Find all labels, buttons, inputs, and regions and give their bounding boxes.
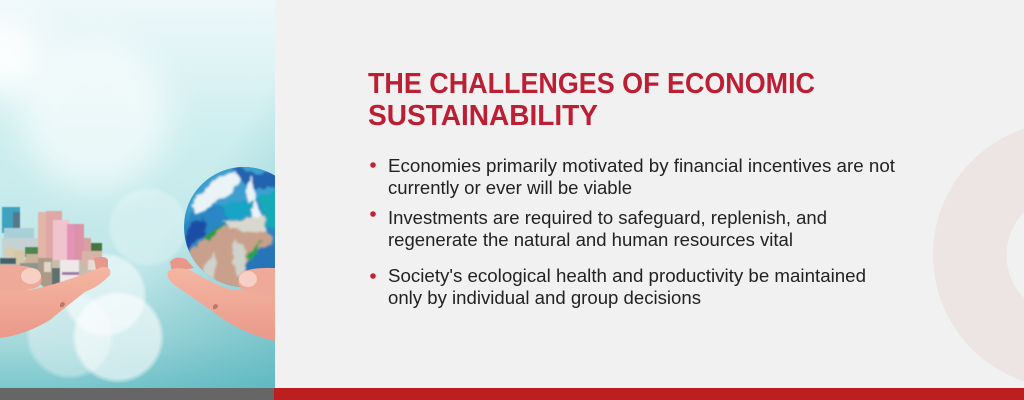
bullet 3: Society's ecological health and productivity be maintained <box>388 266 866 286</box>
title: SUSTAINABILITY <box>368 100 598 132</box>
finger tip behind palm <box>170 258 194 270</box>
sky background <box>0 0 275 388</box>
finger tip behind palm <box>94 257 108 270</box>
photo: hands holding city and globe <box>0 0 282 388</box>
right hand <box>168 258 275 341</box>
globe <box>184 167 275 287</box>
bullet 1: currently or ever will be viable <box>388 178 632 198</box>
bullet 2: regenerate the natural and human resources vital <box>388 230 793 250</box>
left hand <box>0 257 110 338</box>
bottom bar: grey segment <box>0 388 274 400</box>
bottom bar: red segment <box>274 388 1024 400</box>
city skyline <box>0 206 103 287</box>
title: THE CHALLENGES OF ECONOMIC <box>368 68 815 100</box>
palm and fingers <box>168 268 275 341</box>
title <box>368 68 815 132</box>
bullet list <box>370 156 895 308</box>
palm and fingers <box>0 267 110 338</box>
thumbnail <box>21 268 41 284</box>
thumb <box>0 265 42 291</box>
bullet 2: Investments are required to safeguard, replenish, and <box>388 208 827 228</box>
bullet 3: only by individual and group decisions <box>388 288 701 308</box>
thumb <box>238 268 275 290</box>
bullet 3 <box>370 266 866 308</box>
decorative ring <box>933 122 1024 388</box>
bullet 1 <box>370 156 895 198</box>
bullet 2 <box>370 208 827 250</box>
bokeh lights <box>0 5 188 383</box>
bullet 1: Economies primarily motivated by financial incentives are not <box>388 156 895 176</box>
thumbnail <box>239 271 257 287</box>
